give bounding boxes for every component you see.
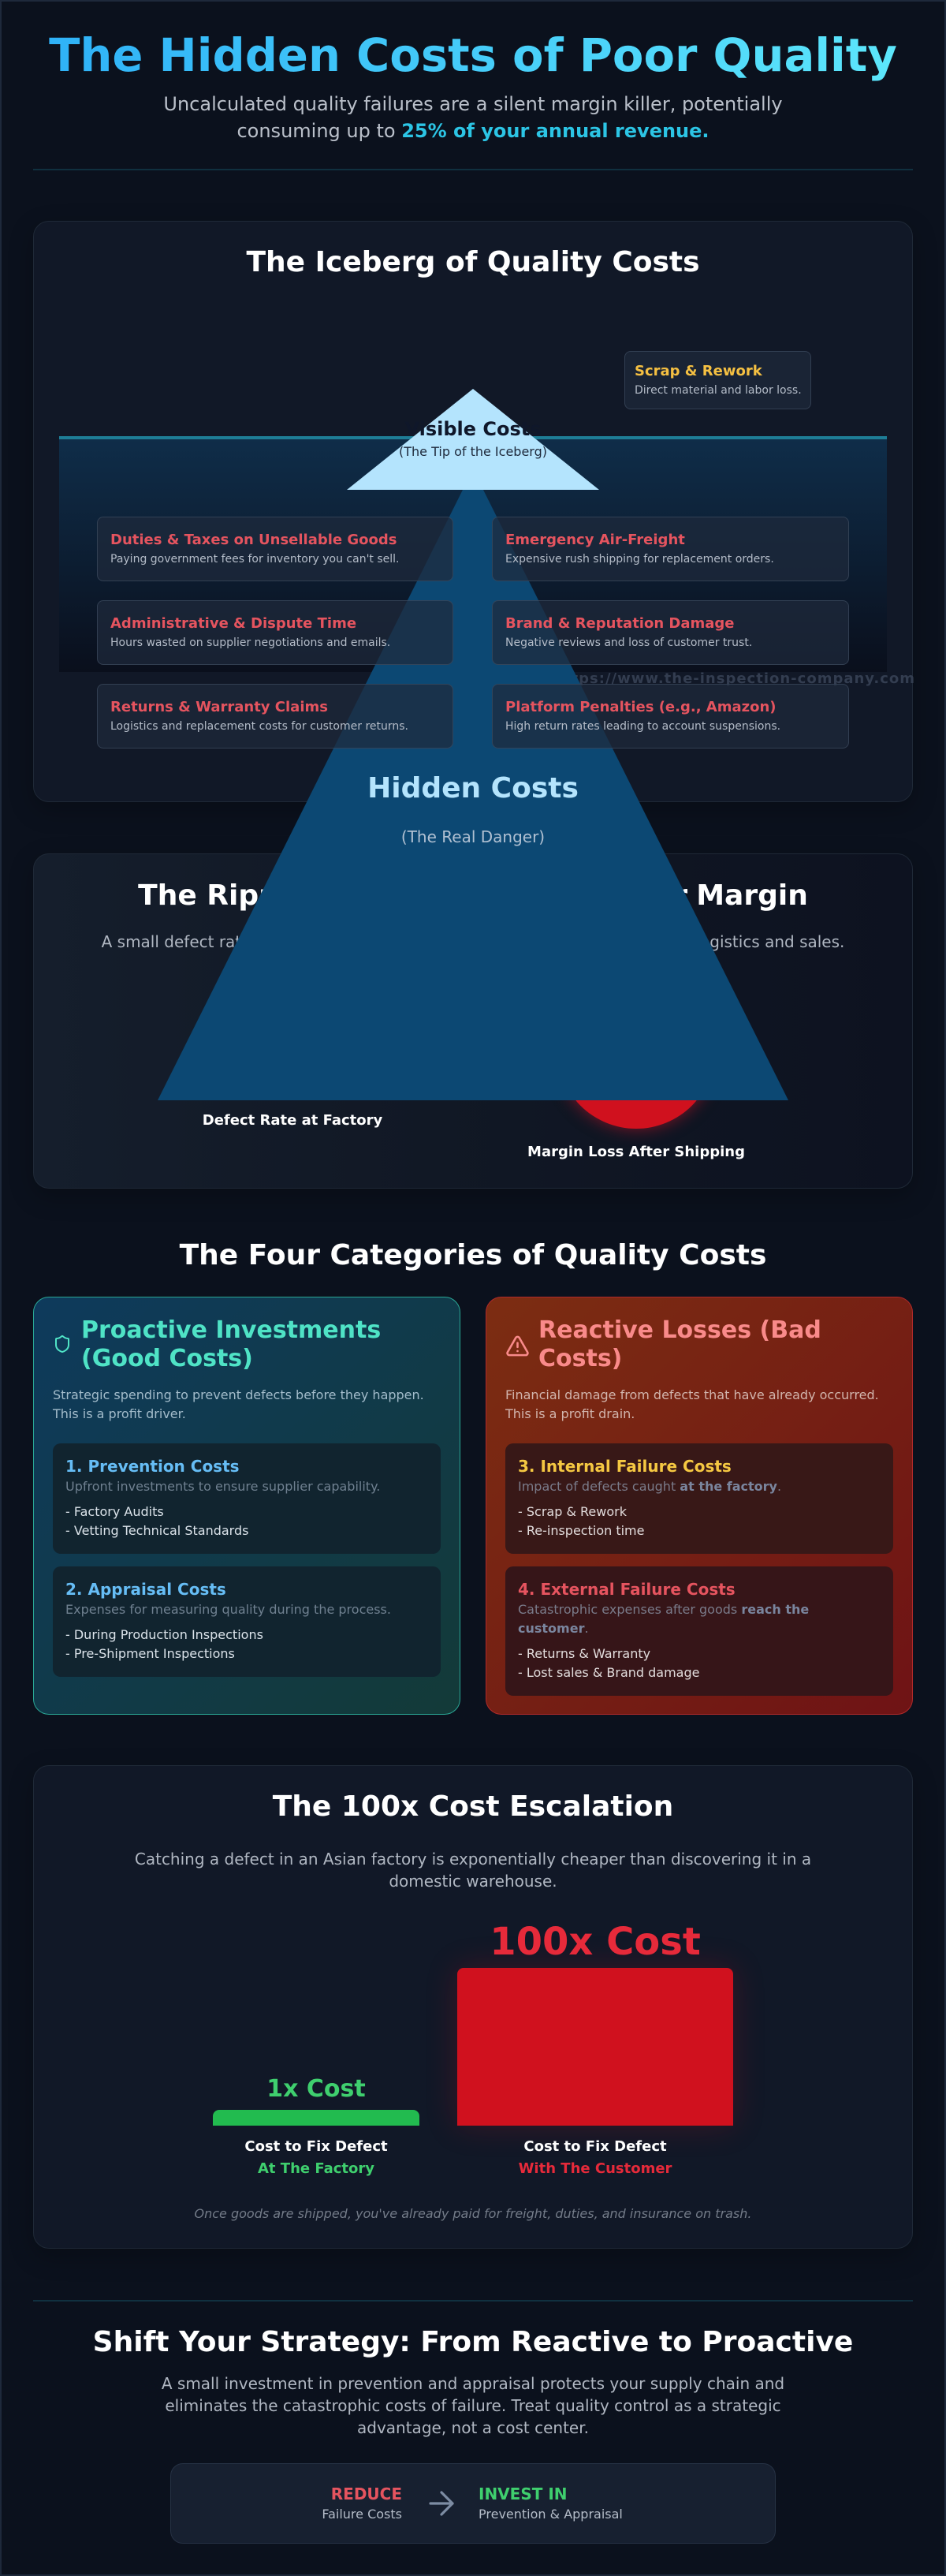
panel: 100x cost escalation bbox=[33, 1765, 913, 2249]
card: platform penalties bbox=[492, 684, 849, 749]
invest in text: INVEST IN bbox=[479, 2485, 568, 2503]
card: brand damage bbox=[492, 600, 849, 665]
label: at the factory: At The Factory bbox=[258, 2160, 374, 2177]
label: at the factory bbox=[244, 2138, 388, 2177]
box: appraisal costs: - During Production Inspections bbox=[65, 1627, 263, 1642]
box: prevention costs: 1. Prevention Costs bbox=[65, 1457, 240, 1476]
card: returns and warranty: Returns & Warranty Claims bbox=[110, 699, 328, 715]
hidden costs triangle bbox=[158, 469, 788, 1100]
heading: proactive: Proactive Investments bbox=[81, 1316, 381, 1344]
title: The Hidden Costs of Poor Quality bbox=[49, 29, 897, 82]
value: 100x cost: 100x Cost bbox=[490, 1920, 701, 1964]
visible costs label: Visible Costs bbox=[404, 418, 542, 440]
box: external failure costs: customer. bbox=[518, 1621, 589, 1636]
box: prevention costs: - Vetting Technical Standards bbox=[65, 1523, 248, 1538]
heading: reactive: Reactive Losses (Bad bbox=[538, 1316, 821, 1344]
card: emergency air-freight: Emergency Air-Freight bbox=[505, 532, 685, 548]
box: internal failure costs: Impact of defects caught at the factory. bbox=[518, 1479, 781, 1494]
box: prevention costs: Upfront investments to ensure supplier capability. bbox=[65, 1479, 380, 1494]
section: conclusion bbox=[93, 2326, 853, 2544]
proactive description: This is a profit driver. bbox=[53, 1406, 186, 1421]
icon: shield bbox=[55, 1335, 69, 1353]
box: external failure costs: 4. External Failure Costs bbox=[518, 1580, 736, 1599]
panel: reactive losses bbox=[486, 1297, 913, 1715]
panel: proactive investments bbox=[33, 1297, 460, 1715]
box: internal failure costs: - Scrap & Rework bbox=[518, 1504, 627, 1519]
conclusion text: advantage, not a cost center. bbox=[357, 2418, 589, 2437]
box: prevention costs bbox=[53, 1443, 441, 1554]
card: administrative time: Administrative & Dispute Time bbox=[110, 615, 356, 632]
box: internal failure costs: - Re-inspection time bbox=[518, 1523, 644, 1538]
box: internal failure costs: 3. Internal Failure Costs bbox=[518, 1457, 732, 1476]
icon: warning triangle bbox=[506, 1336, 529, 1357]
heading: ripple: The Ripple Effect of Defects on Your Margin bbox=[138, 879, 808, 912]
card: emergency air-freight: Expensive rush shipping for replacement orders. bbox=[505, 553, 774, 566]
heading: reactive bbox=[538, 1316, 821, 1372]
escalation description bbox=[135, 1850, 811, 1891]
card: brand damage: Negative reviews and loss of customer trust. bbox=[505, 637, 752, 649]
card: duties and taxes bbox=[97, 517, 453, 581]
card: returns and warranty bbox=[97, 684, 453, 749]
circle: defect rate bbox=[261, 1026, 324, 1089]
heading: iceberg: The Iceberg of Quality Costs bbox=[246, 246, 700, 278]
header bbox=[49, 29, 897, 142]
escalation description: domestic warehouse. bbox=[389, 1872, 557, 1891]
hidden costs sublabel: (The Real Danger) bbox=[401, 827, 545, 846]
panel: ripple effect bbox=[33, 853, 913, 1189]
box: internal failure costs bbox=[505, 1443, 893, 1554]
failure costs text: Failure Costs bbox=[322, 2507, 402, 2522]
label: with the customer bbox=[519, 2138, 672, 2177]
box: external failure costs bbox=[505, 1566, 893, 1696]
card: emergency air-freight bbox=[492, 517, 849, 581]
circle: margin loss bbox=[557, 971, 715, 1129]
subtitle: Uncalculated quality failures are a silent margin killer, potentially bbox=[163, 93, 783, 115]
card: scrap and rework bbox=[624, 351, 811, 409]
heading: escalation: The 100x Cost Escalation bbox=[273, 1790, 673, 1823]
card: administrative time bbox=[97, 600, 453, 665]
proactive description bbox=[52, 1387, 424, 1421]
watermark: https://www.the-inspection-company.com bbox=[553, 670, 915, 687]
label: at the factory: Cost to Fix Defect bbox=[244, 2138, 388, 2155]
value: 1x cost: 1x Cost bbox=[266, 2075, 366, 2103]
ripple description: A small defect rate at the factory compounds to a massive margin loss after logistics and sales. bbox=[102, 932, 844, 951]
card: brand damage: Brand & Reputation Damage bbox=[505, 615, 735, 632]
card: returns and warranty: Logistics and replacement costs for customer returns. bbox=[110, 720, 408, 733]
box: appraisal costs: Expenses for measuring quality during the process. bbox=[65, 1602, 391, 1617]
reactive description: Financial damage from defects that have already occurred. bbox=[505, 1387, 879, 1402]
callout: reduce and invest bbox=[170, 2463, 776, 2544]
box: appraisal costs: - Pre-Shipment Inspections bbox=[65, 1646, 235, 1661]
water bbox=[59, 436, 887, 672]
panel: iceberg of quality costs bbox=[33, 221, 915, 1100]
iceberg card background bbox=[33, 221, 913, 802]
visible costs sublabel: (The Tip of the Iceberg) bbox=[399, 444, 547, 459]
label: with the customer: With The Customer bbox=[519, 2160, 672, 2177]
heading: four categories: The Four Categories of Quality Costs bbox=[180, 1239, 766, 1271]
visible costs tip triangle bbox=[347, 389, 599, 490]
box: appraisal costs: 2. Appraisal Costs bbox=[65, 1580, 226, 1599]
prevention and appraisal text: Prevention & Appraisal bbox=[479, 2507, 623, 2522]
heading: proactive: (Good Costs) bbox=[81, 1345, 253, 1372]
hidden costs label: Hidden Costs bbox=[367, 772, 579, 805]
reduce text: REDUCE bbox=[331, 2485, 402, 2503]
bar: 100x cost bbox=[457, 1968, 733, 2126]
heading: proactive bbox=[81, 1316, 381, 1372]
card: scrap and rework: Direct material and labor loss. bbox=[635, 384, 802, 397]
conclusion text: eliminates the catastrophic costs of failure. Treat quality control as a strategic bbox=[165, 2396, 781, 2415]
box: appraisal costs bbox=[53, 1566, 441, 1677]
heading: reactive: Costs) bbox=[538, 1345, 622, 1372]
escalation description: Catching a defect in an Asian factory is exponentially cheaper than discovering it in a bbox=[135, 1850, 811, 1869]
card: scrap and rework: Scrap & Rework bbox=[635, 363, 762, 379]
label: defect rate at factory: Defect Rate at Factory bbox=[203, 1112, 382, 1129]
bar: 1x cost bbox=[213, 2110, 419, 2126]
card: administrative time: Hours wasted on supplier negotiations and emails. bbox=[110, 637, 390, 649]
conclusion text bbox=[162, 2374, 784, 2437]
reactive description bbox=[505, 1387, 879, 1421]
conclusion text: A small investment in prevention and appraisal protects your supply chain and bbox=[162, 2374, 784, 2393]
box: external failure costs: Catastrophic expenses after goods reach the bbox=[518, 1602, 809, 1617]
card: platform penalties: Platform Penalties (e.g., Amazon) bbox=[505, 699, 777, 715]
footnote: Once goods are shipped, you've already paid for freight, duties, and insurance on trash. bbox=[195, 2206, 751, 2221]
box: external failure costs: - Returns & Warranty bbox=[518, 1646, 650, 1661]
proactive description: Strategic spending to prevent defects before they happen. bbox=[53, 1387, 424, 1402]
heading: shift your strategy: Shift Your Strategy: From Reactive to Proactive bbox=[93, 2326, 853, 2358]
box: external failure costs: - Lost sales & Brand damage bbox=[518, 1665, 699, 1680]
icon: arrow bbox=[429, 2491, 454, 2516]
subtitle: consuming up to 25% of your annual revenue. bbox=[236, 120, 710, 142]
card: duties and taxes: Paying government fees for inventory you can't sell. bbox=[110, 553, 400, 566]
card: duties and taxes: Duties & Taxes on Unsellable Goods bbox=[110, 532, 397, 548]
label: with the customer: Cost to Fix Defect bbox=[523, 2138, 667, 2155]
box: prevention costs: - Factory Audits bbox=[65, 1504, 164, 1519]
card: platform penalties: High return rates leading to account suspensions. bbox=[505, 720, 780, 733]
label: margin loss after shipping: Margin Loss After Shipping bbox=[527, 1144, 745, 1160]
subtitle bbox=[163, 93, 783, 142]
reactive description: This is a profit drain. bbox=[505, 1406, 635, 1421]
